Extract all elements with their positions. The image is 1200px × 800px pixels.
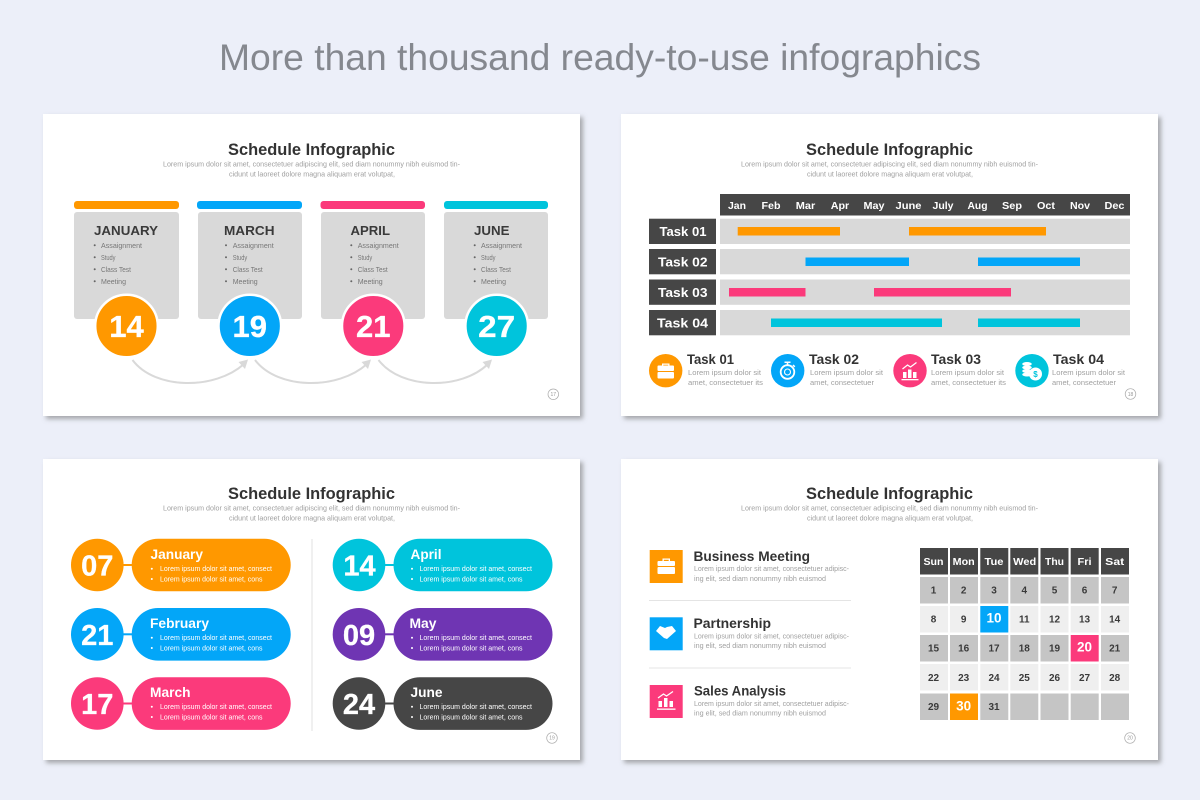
- arrow: 21 to 27: [378, 360, 492, 383]
- item: Sales Analysis: [650, 684, 849, 718]
- date badge 19: [218, 295, 281, 357]
- card: January: JANUARY: [94, 223, 158, 238]
- legend: task 04: Task 04: [1053, 352, 1105, 367]
- card: June: Meeting: [481, 277, 506, 286]
- item: January: Lorem ipsum dolor sit amet, cons: [160, 574, 263, 584]
- calendar grid: 25: [1019, 673, 1030, 684]
- item: June: June: [410, 685, 443, 700]
- row: task 04: [649, 310, 1130, 335]
- calendar grid: Fri: [1078, 557, 1092, 568]
- item: June: Lorem ipsum dolor sit amet, consect: [420, 702, 533, 711]
- legend: task 03: Task 03: [931, 352, 981, 367]
- card: June: Assaignment: [481, 241, 523, 250]
- item: May: Lorem ipsum dolor sit amet, cons: [420, 644, 523, 652]
- page number 17: 17: [551, 392, 556, 398]
- arrow: 19 to 21: [255, 360, 371, 383]
- subtitle: cidunt ut laoreet dolore magna aliquam erat volutpat,: [807, 514, 973, 522]
- item: June: Lorem ipsum dolor sit amet, cons: [420, 712, 523, 722]
- item: May: 09: [343, 620, 375, 652]
- subtitle: [163, 160, 460, 178]
- item: Business Meeting: Business Meeting: [694, 549, 810, 564]
- legend: task 02: [771, 352, 884, 387]
- calendar grid: 27: [1079, 673, 1090, 684]
- calendar grid: 7: [1112, 586, 1118, 596]
- calendar grid: 29: [928, 702, 939, 713]
- calendar grid: 9: [961, 614, 967, 626]
- calendar grid: 14: [1109, 614, 1121, 626]
- arrow: 14 to 19: [132, 360, 248, 383]
- page number 19: 19: [549, 736, 555, 742]
- subtitle: [741, 160, 1038, 178]
- item: February: 21: [81, 620, 113, 652]
- month header: Jan: [728, 201, 746, 212]
- calendar grid: 16: [958, 644, 970, 654]
- calendar grid: 4: [1022, 586, 1028, 596]
- item: April: Lorem ipsum dolor sit amet, consect: [420, 564, 533, 573]
- legend: task 03: Lorem ipsum dolor sit: [931, 368, 1005, 377]
- card: April: Assaignment: [358, 241, 400, 250]
- month header: [720, 194, 1130, 216]
- card: April: Class Test: [358, 265, 388, 274]
- card: June: Study: [481, 253, 496, 262]
- row: task 02: [649, 249, 1130, 274]
- item: February: [71, 608, 291, 661]
- legend: task 02: Task 02: [809, 352, 859, 367]
- card: January: Assaignment: [101, 241, 143, 250]
- item: Business Meeting: ing elit, sed diam nonummy nibh euismod: [694, 574, 826, 583]
- calendar grid: Sat: [1105, 557, 1125, 568]
- item: May: May: [410, 616, 437, 631]
- legend: task 04: $: [1033, 370, 1038, 379]
- card: January: Class Test: [101, 265, 132, 274]
- item: January: 07: [81, 550, 113, 582]
- item: Partnership: Lorem ipsum dolor sit amet, consectetuer adipisc-: [694, 632, 849, 640]
- subtitle: Lorem ipsum dolor sit amet, consectetuer adipiscing elit, sed diam nonummy nibh euismod tin-: [163, 504, 460, 512]
- calendar grid: 5: [1052, 586, 1058, 596]
- calendar grid: 2: [961, 586, 967, 596]
- calendar grid: 24: [988, 673, 1000, 684]
- item: February: February: [150, 616, 209, 631]
- item: Partnership: ing elit, sed diam nonummy nibh euismod: [694, 641, 826, 650]
- calendar grid: 28: [1109, 673, 1121, 684]
- calendar grid: 20: [1077, 640, 1092, 654]
- panel: schedule cards with dates: [43, 114, 580, 416]
- subtitle: cidunt ut laoreet dolore magna aliquam erat volutpat,: [229, 514, 395, 522]
- page number 17: [548, 389, 559, 400]
- month header: Sep: [1002, 201, 1022, 212]
- legend: task 01: Lorem ipsum dolor sit: [688, 368, 762, 377]
- item: March: Lorem ipsum dolor sit amet, consect: [160, 702, 273, 711]
- calendar grid: 31: [988, 702, 1000, 713]
- calendar grid: 18: [1019, 644, 1030, 654]
- card: January: Meeting: [101, 277, 126, 286]
- item: June: [333, 677, 552, 730]
- legend: task 02: amet, consectetuer: [810, 378, 874, 387]
- month header: Oct: [1037, 201, 1056, 212]
- heading: Schedule Infographic: [806, 484, 973, 503]
- legend: task 04: amet, consectetuer: [1052, 378, 1116, 387]
- page number 18: 18: [1128, 392, 1133, 398]
- calendar grid: 15: [928, 644, 939, 654]
- subtitle: Lorem ipsum dolor sit amet, consectetuer adipiscing elit, sed diam nonummy nibh euismod tin-: [741, 504, 1038, 512]
- page number 20: 20: [1127, 736, 1133, 742]
- date badge 27: [465, 295, 528, 357]
- card: March: Study: [233, 253, 247, 262]
- subtitle: Lorem ipsum dolor sit amet, consectetuer adipiscing elit, sed diam nonummy nibh euismod tin-: [741, 160, 1038, 168]
- panel: monthly pills: [43, 459, 580, 760]
- subtitle: cidunt ut laoreet dolore magna aliquam erat volutpat,: [229, 170, 395, 178]
- card: March: Meeting: [233, 277, 258, 286]
- month header: Dec: [1104, 201, 1125, 212]
- page number 18: [1125, 389, 1136, 399]
- row: task 01: [649, 219, 1130, 244]
- item: March: [71, 677, 291, 730]
- calendar grid: 12: [1049, 614, 1060, 626]
- legend: task 01: [649, 352, 763, 387]
- item: Sales Analysis: Lorem ipsum dolor sit amet, consectetuer adipisc-: [694, 699, 849, 708]
- card: April: Study: [358, 253, 372, 262]
- card: June: Class Test: [481, 265, 512, 274]
- month header: Apr: [831, 201, 849, 212]
- card: June: JUNE: [474, 223, 510, 238]
- month header: May: [864, 201, 885, 212]
- main title: More than thousand ready-to-use infographics: [219, 37, 981, 78]
- legend: task 04: Lorem ipsum dolor sit: [1052, 368, 1126, 377]
- item: May: [333, 608, 552, 661]
- item: April: [333, 539, 552, 591]
- calendar grid: 26: [1049, 673, 1060, 684]
- page number 19: [547, 733, 557, 743]
- calendar grid: Wed: [1013, 557, 1036, 568]
- row: task 04: Task 04: [657, 316, 709, 330]
- calendar grid: Tue: [984, 557, 1004, 568]
- item: April: 14: [343, 550, 376, 582]
- card: January: [74, 201, 179, 319]
- calendar grid: 11: [1019, 614, 1030, 626]
- month header: Nov: [1070, 201, 1090, 212]
- month header: July: [932, 201, 954, 212]
- heading: Schedule Infographic: [228, 140, 395, 159]
- legend: task 03: amet, consectetuer its: [931, 378, 1006, 387]
- subtitle: [163, 504, 460, 522]
- date badge 14: [95, 295, 158, 357]
- item: February: Lorem ipsum dolor sit amet, consect: [160, 633, 273, 642]
- calendar grid: 8: [931, 614, 937, 626]
- subtitle: [741, 504, 1038, 522]
- calendar grid: 23: [958, 673, 970, 684]
- calendar grid: 17: [988, 644, 1000, 654]
- date badge 21: [342, 295, 405, 357]
- calendar grid: 30: [956, 698, 971, 714]
- item: January: Lorem ipsum dolor sit amet, consect: [160, 564, 273, 573]
- card: April: [320, 201, 425, 319]
- item: Sales Analysis: ing elit, sed diam nonummy nibh euismod: [694, 708, 826, 718]
- legend: task 04: [1015, 352, 1126, 387]
- card: March: MARCH: [224, 223, 274, 238]
- month header: Feb: [762, 201, 780, 212]
- card: June: [444, 201, 548, 319]
- heading: Schedule Infographic: [228, 484, 395, 503]
- item: April: Lorem ipsum dolor sit amet, cons: [420, 574, 523, 584]
- calendar grid: 13: [1079, 614, 1090, 626]
- item: May: Lorem ipsum dolor sit amet, consect: [420, 633, 533, 642]
- card: April: APRIL: [350, 223, 390, 238]
- subtitle: cidunt ut laoreet dolore magna aliquam erat volutpat,: [807, 170, 973, 178]
- row: task 03: Task 03: [658, 285, 708, 300]
- row: task 02: Task 02: [658, 254, 708, 270]
- month header: Aug: [968, 201, 988, 212]
- date badge 19: 19: [233, 309, 267, 344]
- page number 20: [1125, 733, 1135, 743]
- calendar grid: Mon: [953, 557, 975, 568]
- item: January: January: [150, 547, 203, 562]
- item: Partnership: Partnership: [694, 616, 771, 631]
- calendar grid: 21: [1109, 644, 1121, 654]
- item: February: Lorem ipsum dolor sit amet, cons: [160, 644, 263, 652]
- card: January: Study: [101, 253, 116, 262]
- date badge 27: 27: [478, 309, 515, 344]
- item: March: March: [150, 685, 190, 700]
- legend: task 03: [893, 352, 1006, 387]
- month header: June: [896, 201, 922, 212]
- item: Partnership: [650, 616, 849, 650]
- card: April: Meeting: [358, 277, 383, 286]
- legend: task 02: Lorem ipsum dolor sit: [810, 368, 884, 377]
- legend: task 01: amet, consectetuer its: [688, 378, 763, 387]
- date badge 14: 14: [109, 309, 144, 344]
- item: March: 17: [81, 689, 113, 721]
- card: March: Assaignment: [233, 241, 275, 250]
- calendar grid: 19: [1049, 644, 1060, 654]
- item: Business Meeting: [650, 549, 849, 583]
- calendar grid: 10: [986, 610, 1002, 626]
- row: task 03: [649, 280, 1130, 305]
- calendar grid: 6: [1082, 586, 1088, 596]
- legend: task 01: Task 01: [687, 352, 734, 367]
- month header: Mar: [796, 201, 815, 212]
- calendar grid: 1: [931, 586, 937, 596]
- card: March: Class Test: [233, 265, 263, 274]
- item: Sales Analysis: Sales Analysis: [694, 684, 786, 698]
- calendar grid: 22: [928, 673, 939, 684]
- panel: calendar: [621, 459, 1158, 760]
- calendar grid: [920, 548, 1129, 720]
- card: March: [197, 201, 302, 319]
- item: June: 24: [343, 689, 375, 721]
- row: task 01: Task 01: [660, 224, 706, 239]
- item: March: Lorem ipsum dolor sit amet, cons: [160, 712, 263, 722]
- item: April: April: [410, 547, 442, 562]
- subtitle: Lorem ipsum dolor sit amet, consectetuer adipiscing elit, sed diam nonummy nibh euismod tin-: [163, 160, 460, 168]
- item: January: [71, 539, 291, 591]
- panel: gantt schedule: [621, 114, 1158, 416]
- calendar grid: Sun: [924, 557, 944, 568]
- heading: Schedule Infographic: [806, 140, 973, 159]
- calendar grid: 3: [991, 586, 997, 596]
- item: Business Meeting: Lorem ipsum dolor sit amet, consectetuer adipisc-: [694, 564, 849, 573]
- calendar grid: Thu: [1045, 557, 1064, 568]
- date badge 21: 21: [356, 309, 391, 344]
